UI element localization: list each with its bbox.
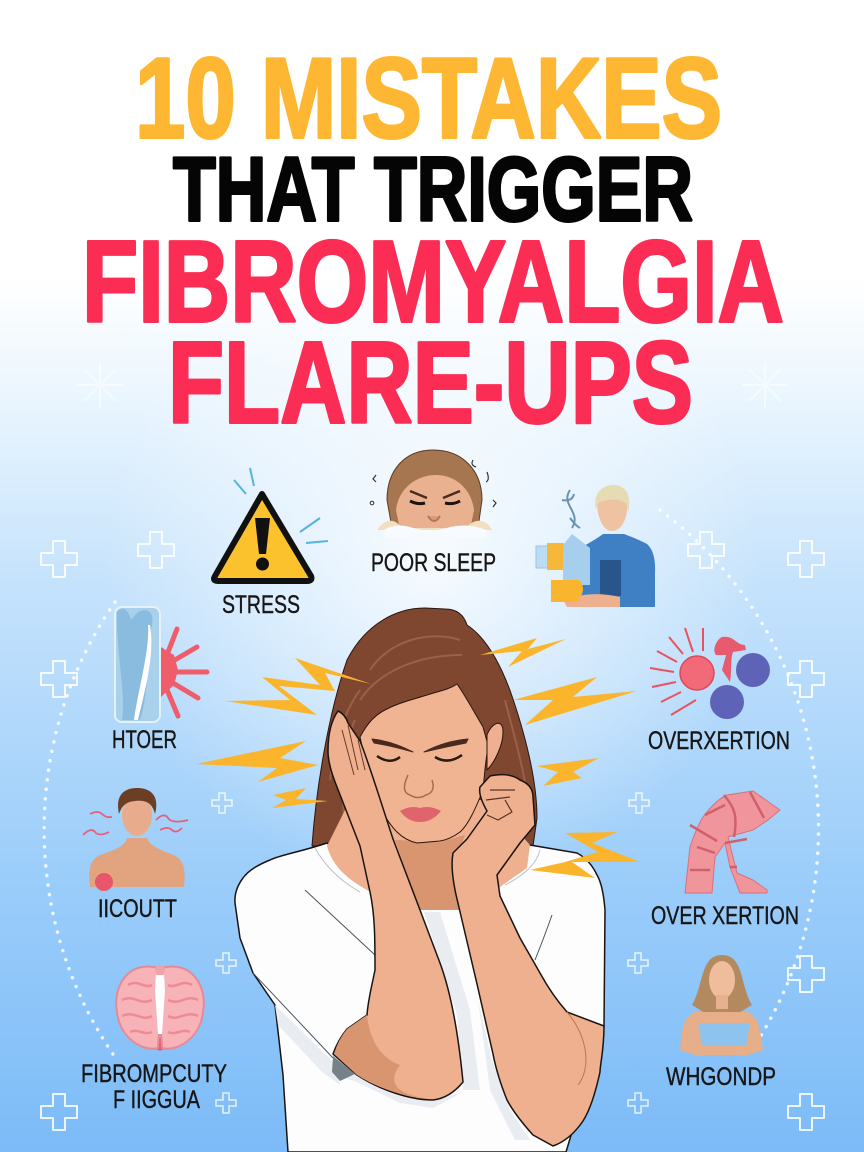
bolt small left <box>272 788 328 808</box>
label: htoer: HTOER <box>112 726 177 754</box>
label: fibrompcuty figgua: FIBROMPCUTY <box>81 1060 227 1088</box>
icon: man with drink <box>536 485 655 607</box>
brows <box>372 739 468 752</box>
bolt mid right <box>537 758 599 786</box>
icon: brain <box>116 965 204 1050</box>
right arm and hand <box>452 775 604 1146</box>
label: over xertion: OVER XERTION <box>651 902 799 930</box>
face <box>360 684 488 843</box>
title line: that trigger: THAT TRIGGER <box>173 140 693 240</box>
elbow shade <box>334 1015 433 1099</box>
nose <box>404 775 433 798</box>
left arm and hand <box>328 711 463 1100</box>
label: fibrompcuty figgua: F IIGGUA <box>113 1086 200 1114</box>
lightning bolts <box>196 638 640 878</box>
mouth <box>400 807 441 822</box>
icon: warning triangle <box>214 468 328 581</box>
grey cuff <box>332 1056 355 1081</box>
icon: woman <box>680 955 763 1056</box>
bolt mid left <box>196 741 318 782</box>
icon: muscle arm <box>685 791 780 893</box>
shirt <box>235 843 605 1152</box>
sleeve folds <box>253 890 552 1058</box>
icon: poor sleep face <box>370 450 496 538</box>
title <box>82 36 784 448</box>
label: overxertion: OVERXERTION <box>648 727 790 755</box>
bolt top right <box>480 638 566 667</box>
bolt upper right <box>513 677 637 725</box>
label: iicoutt: IICOUTT <box>98 895 177 923</box>
label: stress: STRESS <box>222 591 300 619</box>
bolt lower right <box>530 832 640 878</box>
shirt shadows <box>275 912 530 1140</box>
icon: body and pain burst <box>115 607 207 722</box>
icon: man with pain <box>83 788 188 891</box>
label: poor sleep: POOR SLEEP <box>371 549 496 577</box>
neck <box>327 800 530 910</box>
bolt upper left <box>225 658 371 715</box>
hair <box>312 608 537 846</box>
label: fibrompcuty figgua <box>81 1060 227 1114</box>
ear <box>487 723 503 770</box>
title line: 10 mistakes: 10 MISTAKES <box>135 36 722 162</box>
title line: flare-ups: FLARE-UPS <box>168 318 693 448</box>
central woman figure <box>235 608 605 1152</box>
eyes <box>377 755 462 761</box>
label: whgondp: WHGONDP <box>666 1063 776 1091</box>
icon: pills and burst <box>650 628 770 719</box>
